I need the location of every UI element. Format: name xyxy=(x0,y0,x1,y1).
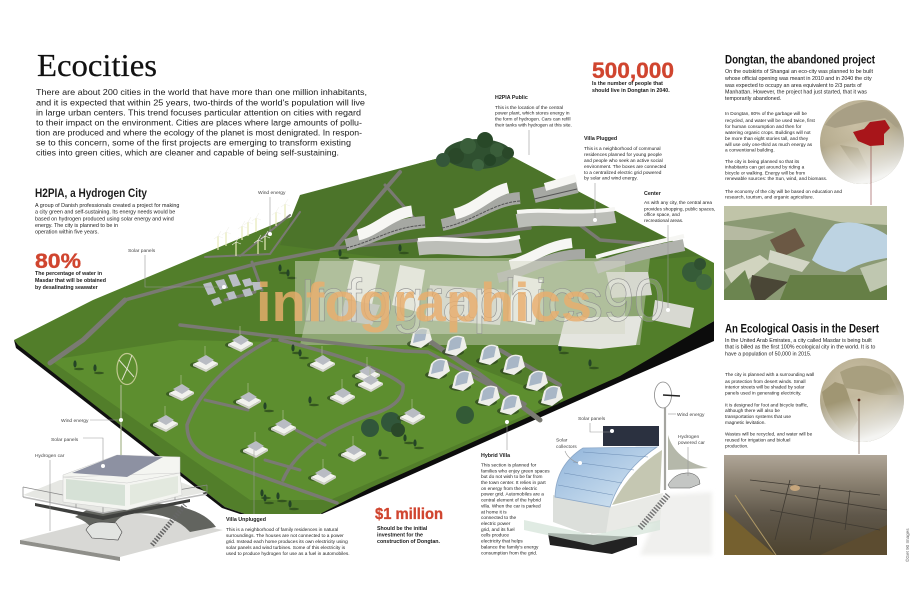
tent roof xyxy=(668,435,708,470)
long residential buildings xyxy=(346,178,684,278)
watermark orange text: infographics xyxy=(256,271,592,333)
callout: hydrogen powered car: powered car xyxy=(678,440,705,446)
text: Villa Unplugged: surroundings. The houses are not connected to a power xyxy=(226,533,344,539)
text: Hybrid Villa: power grid. Automobiles are a xyxy=(481,492,544,498)
text: Oasis details: magnetic levitation. xyxy=(725,420,766,426)
stat: 80% xyxy=(35,250,106,291)
watermark band xyxy=(295,261,625,334)
text: Oasis intro: In the United Arab Emirates, a city called Masdar is being built xyxy=(725,338,872,344)
callout: wind energy: Wind energy xyxy=(258,190,286,196)
text: Hybrid Villa: villa. When the car is parked xyxy=(481,504,541,510)
forest xyxy=(361,132,712,437)
text: H2PIA description xyxy=(35,203,179,236)
illustration: hybrid villa xyxy=(524,382,712,555)
intro text: to their impact on the environment. Cities are places where large amounts of pollu- xyxy=(36,118,362,128)
callout: hydrogen powered car xyxy=(678,434,705,476)
callout: wind energy (villa): Wind energy xyxy=(61,418,89,424)
callout: H2PIA Public: the form of hydrogen. Cars can refill xyxy=(495,116,571,122)
callout: Villa Plugged: Villa Plugged xyxy=(584,136,617,142)
callout: hybrid villa solar panels xyxy=(578,416,614,433)
text: Villa Unplugged: grid. Instead each home produces its own electricity using xyxy=(226,539,348,545)
text: Dongtan intro: Manhattan. However, the project had just started, that it was xyxy=(725,90,867,96)
callout: solar panels xyxy=(128,248,226,289)
text: Dongtan details: research, tourism, and organic agriculture. xyxy=(725,194,814,200)
stat: 80%: Masdar that will be obtained xyxy=(35,278,106,284)
China shape xyxy=(853,120,890,146)
callout: hydrogen car (villa): Hydrogen car xyxy=(35,453,65,459)
roads xyxy=(50,172,660,503)
stat: $1 million: Should be the initial xyxy=(377,526,428,532)
text: Dongtan details: will use only one-third as much energy as xyxy=(725,142,813,148)
callout: Villa Plugged: residences planned for young people xyxy=(584,152,662,158)
callout: Villa Plugged: This is a neighborhood of communal xyxy=(584,146,661,152)
intro text: cities into green cities, which are cleaner and capable of being self-sustaining. xyxy=(36,148,339,158)
small trees xyxy=(73,244,599,510)
intro text: and it is expected that within 25 years, two-thirds of the world's population will live xyxy=(36,98,365,108)
text: Oasis details: production. xyxy=(725,444,749,450)
text: Dongtan details: The city is being planned so that its xyxy=(725,159,800,165)
callout: hybrid villa solar panels: Solar panels xyxy=(578,416,606,422)
stat: 500,000 xyxy=(592,58,674,94)
text: Hybrid Villa: Hybrid Villa xyxy=(481,453,510,459)
callout: solar panels (villa): Solar panels xyxy=(51,437,79,443)
text: Oasis details: transportation systems that use xyxy=(725,414,791,420)
callout: H2PIA Public: This is the location of the central xyxy=(495,105,563,111)
callout: Villa Plugged: environment. The boxes are connected xyxy=(584,164,667,170)
solar panel xyxy=(603,426,659,446)
callout: Center: office space, and xyxy=(644,212,680,218)
house body xyxy=(63,455,182,510)
text: Villa Unplugged xyxy=(226,450,350,557)
glass vault xyxy=(555,447,657,507)
land base xyxy=(14,150,714,514)
callout: solar panels (villa) xyxy=(51,437,105,468)
text: Dongtan details: watering organic crops. Buildings will not xyxy=(725,130,811,136)
callout: Villa Plugged: to a centralized electric grid powered xyxy=(584,170,662,176)
text: Oasis details: The city is planned with a surrounding wall xyxy=(725,372,814,378)
text: Hybrid Villa: consumption from the grid. xyxy=(481,550,537,556)
solar panel field xyxy=(203,274,262,306)
callout: H2PIA Public: their tanks with hydrogen at this site. xyxy=(495,122,572,128)
globe: Arabia xyxy=(820,358,904,454)
text: Oasis details: reused for irrigation and biofuel xyxy=(725,438,790,444)
heading: Dongtan: Dongtan, the abandoned project xyxy=(725,54,875,66)
stat: 80%: by desalinating seawater xyxy=(35,285,98,291)
text: Oasis details xyxy=(725,372,814,450)
callout: solar collectors xyxy=(556,438,582,465)
callout: Villa Plugged: and people who seek an active social xyxy=(584,158,663,164)
photo: Masdar aerial xyxy=(724,455,887,555)
text: Dongtan details: recycled, and water will be used twice, first xyxy=(725,118,815,124)
text: Oasis details: interior streets will be shaded by solar xyxy=(725,384,805,390)
illustration: unplugged villa xyxy=(20,354,223,561)
mast and wind rotor xyxy=(120,385,122,455)
intro text: tion are produced and where the ecology of the planet is most denigrated. In respon- xyxy=(36,128,362,138)
callout: Center: recreational areas. xyxy=(644,218,683,224)
globe: China xyxy=(820,100,904,205)
text: Hybrid Villa: on energy from the electric xyxy=(481,486,538,492)
text: Oasis intro xyxy=(725,338,875,358)
text: Dongtan details: renewable sources: the Sun, wind, and biomass. xyxy=(725,176,827,182)
text: Hybrid Villa: central element of the hybrid xyxy=(481,498,541,504)
heading: H2PIA: H2PIA, a Hydrogen City xyxy=(35,188,148,200)
text: Dongtan intro: temporarily abandoned. xyxy=(725,96,781,102)
text: Hybrid Villa: connected to the xyxy=(481,515,516,521)
text: H2PIA description: a city green and self-sustaining. Its energy needs would be xyxy=(35,210,175,216)
callout: hydrogen powered car: Hydrogen xyxy=(678,434,699,440)
stair xyxy=(152,505,185,545)
text: Hybrid Villa: electricity that helps xyxy=(481,538,523,544)
text: Hybrid Villa: cells produce xyxy=(481,532,509,538)
callout: H2PIA Public: H2PIA Public xyxy=(495,95,528,101)
text: H2PIA description: A group of Danish professionals created a project for making xyxy=(35,203,179,209)
stat: 80%: 80% xyxy=(35,250,81,273)
text: Dongtan intro xyxy=(724,69,873,102)
callout: solar panels: Solar panels xyxy=(128,248,156,254)
stairs xyxy=(640,495,668,528)
callout: solar collectors: Solar xyxy=(556,438,568,444)
globe highlight xyxy=(820,358,904,442)
small unplugged villas xyxy=(150,326,425,485)
text: Hybrid Villa xyxy=(481,420,550,556)
text: Oasis intro: that is billed as the first 100% ecological city in the world. It is to xyxy=(725,344,875,350)
center hangars xyxy=(340,260,694,349)
text: H2PIA description: operation within five years. xyxy=(35,230,99,236)
text: Oasis details: although there will also be xyxy=(725,408,780,414)
text: Hybrid Villa: the town center. It relies in part xyxy=(481,480,546,486)
callout: hybrid villa wind energy xyxy=(668,412,705,418)
intro text: There are about 200 cities in the world that have more than one million inhabitants, xyxy=(36,87,367,97)
text: Dongtan details xyxy=(725,111,842,200)
stat: 500,000: 500,000 xyxy=(592,58,674,83)
text: Hybrid Villa: This section is planned for xyxy=(481,462,537,468)
landscape model xyxy=(14,132,714,514)
text: H2PIA description: energy. The city is planned to be in xyxy=(35,223,118,229)
stat: $1 million xyxy=(375,506,443,545)
roof xyxy=(72,455,163,477)
stat: 500,000: should live in Dongtan in 2040. xyxy=(592,88,670,94)
dark base xyxy=(548,533,637,554)
text: Oasis details: It is designed for foot and bicycle traffic, xyxy=(725,402,808,408)
callout: hydrogen car (villa) xyxy=(35,453,65,531)
text: Dongtan intro: was expected to occupy an area equivalent to 2/3 parts of xyxy=(724,83,862,89)
callout: wind energy xyxy=(258,190,286,236)
text: Dongtan intro: On the outskirts of Shangai an eco-city was planned to be built xyxy=(725,69,873,75)
text: Oasis details: as protection from desert winds. Small xyxy=(725,379,806,385)
text: Dongtan intro: whose official opening was meant in 2010 and in 2040 the city xyxy=(724,76,872,82)
stat: $1 million: $1 million xyxy=(375,506,443,523)
text: Hybrid Villa: at home it is xyxy=(481,510,507,516)
text: Villa Unplugged: Villa Unplugged xyxy=(226,517,266,523)
glass deck xyxy=(524,520,660,545)
interior xyxy=(612,450,662,505)
callout: Villa Plugged xyxy=(584,136,667,222)
heading: Oasis: An Ecological Oasis in the Desert xyxy=(725,324,879,336)
pillars xyxy=(75,503,216,537)
text: Hybrid Villa: but do not wish to be far from xyxy=(481,474,543,480)
mast and rotor xyxy=(664,408,666,490)
callout: Center: provides shopping, public spaces, xyxy=(644,206,715,212)
callout: H2PIA Public: power plant, which stores energy in xyxy=(495,110,570,116)
intro text: in large urban centers. This trend focuses particular attention on cities with regard xyxy=(36,108,361,118)
text: Villa Unplugged: used to produce hydrogen for use as a fuel in automobiles. xyxy=(226,551,350,557)
stat: 500,000: Is the number of people that xyxy=(592,81,663,87)
callout: Center xyxy=(644,191,715,312)
watermark outline text: Infographics90 xyxy=(300,267,665,334)
text: Dongtan details: for human consumption and then for xyxy=(725,124,802,130)
text: Hybrid Villa: families who enjoy green spaces xyxy=(481,468,550,474)
deck xyxy=(23,480,207,513)
small hybrid villas xyxy=(407,328,563,415)
text: Dongtan details: The economy of the city will be based on education and xyxy=(725,189,842,195)
stat: $1 million: construction of Dongtan. xyxy=(377,539,440,545)
callout: Center: Center xyxy=(644,191,661,197)
callout: H2PIA Public xyxy=(495,95,572,155)
text: Dongtan details: In Dongtan, 80% of the garbage will be xyxy=(725,111,807,117)
wind turbines xyxy=(205,199,300,257)
photo: Dongtan aerial xyxy=(724,206,887,300)
stat: 80%: The percentage of water in xyxy=(35,271,102,277)
car xyxy=(86,522,122,540)
text: Oasis details: Wastes will be recycled, and water will be xyxy=(725,432,813,438)
hydrogen car xyxy=(668,473,700,488)
text: Hybrid Villa: electric power xyxy=(481,521,511,527)
intro text xyxy=(36,87,367,158)
text: Villa Unplugged: solar panels and wind turbines. Some of this electricity is xyxy=(226,545,346,551)
title: Ecocities xyxy=(37,47,157,83)
image credit: ©Get 90 Images xyxy=(904,528,910,562)
callout: Villa Plugged: by solar and wind energy. xyxy=(584,176,638,182)
callout: Center: As with any city, the central area xyxy=(644,200,712,206)
text: H2PIA description: based on hydrogen produced using solar energy and wind xyxy=(35,216,174,222)
globe highlight xyxy=(820,100,904,184)
text: Hybrid Villa: grid, and its fuel xyxy=(481,527,515,533)
text: Oasis details: panels used in generating electricity. xyxy=(725,390,802,396)
intro text: se to this concern, some of the first projects are emerging to transform existing xyxy=(36,138,351,148)
text: Dongtan details: be more than eight stories tall, and they xyxy=(725,136,809,142)
text: Dongtan details: inhabitants can get around by riding a xyxy=(725,164,805,170)
callout: solar collectors: collectors xyxy=(556,444,577,450)
ground shadow xyxy=(640,492,712,555)
stat: $1 million: investment for the xyxy=(377,532,423,538)
floor and walls xyxy=(590,493,663,535)
callout: wind energy (villa) xyxy=(61,418,123,424)
text: Dongtan details: a conventional building. xyxy=(725,148,775,154)
text: Oasis intro: have a population of 50,000 in 2015. xyxy=(725,352,811,358)
ground slab xyxy=(20,512,223,557)
text: Hybrid Villa: balance the family's energy xyxy=(481,544,539,550)
text: Villa Unplugged: This is a neighborhood of family residences in natural xyxy=(226,527,338,533)
text: Dongtan details: bicycle or walking. Energy will be from xyxy=(725,170,805,176)
callout: hybrid villa wind energy: Wind energy xyxy=(677,412,705,418)
